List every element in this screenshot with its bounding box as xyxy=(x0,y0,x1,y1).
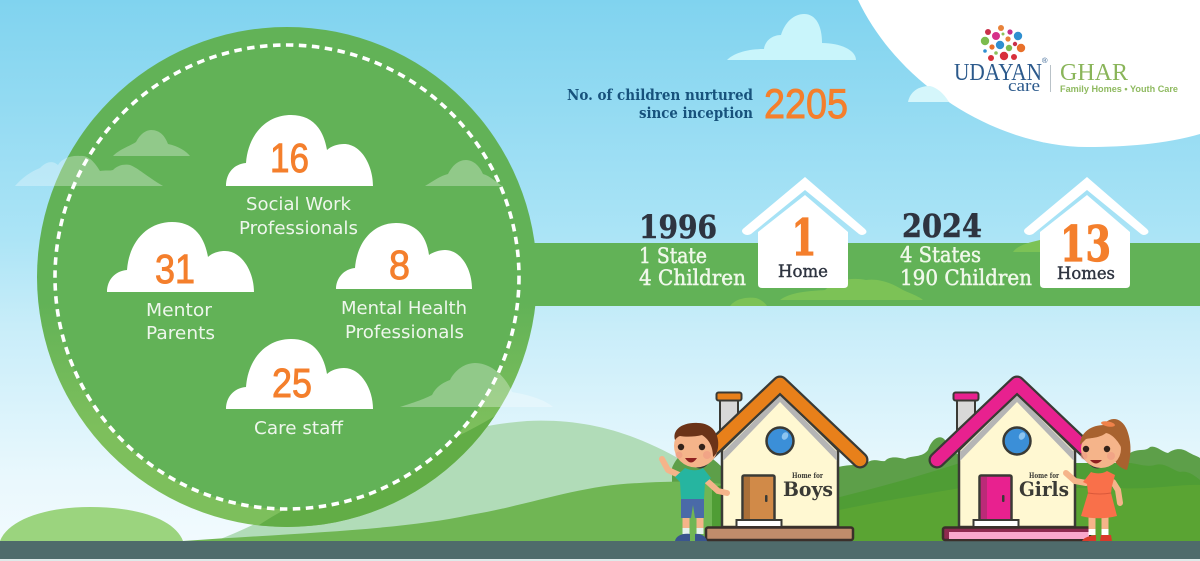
stat: mentor parents xyxy=(107,222,254,344)
logo tagline: Family Homes • Youth Care xyxy=(1060,84,1178,95)
round window xyxy=(766,428,794,454)
roof outline xyxy=(700,384,860,460)
details 1996: 1 State xyxy=(639,244,707,268)
timeline 1996 xyxy=(639,177,866,290)
body xyxy=(758,195,848,288)
boy shirt xyxy=(675,468,711,499)
number 31: 31 xyxy=(155,246,195,292)
base highlight xyxy=(949,532,1089,539)
boy eyes xyxy=(678,444,705,450)
label: Parents xyxy=(146,323,215,344)
boy shorts xyxy=(681,497,704,518)
callout text: since inception xyxy=(639,105,753,122)
panel: staff circle xyxy=(15,27,560,560)
door xyxy=(742,476,774,520)
hills: right green slope xyxy=(712,463,1200,541)
sky cloud top xyxy=(727,14,856,60)
girl hair xyxy=(1080,425,1121,447)
details 2024: 4 States xyxy=(900,243,981,267)
roof outline xyxy=(937,384,1097,460)
wall xyxy=(722,393,838,527)
label: Homes xyxy=(1057,264,1115,284)
girl mouth xyxy=(1090,460,1102,464)
white house 2 xyxy=(1024,177,1148,288)
roof xyxy=(1024,177,1148,235)
label: Mental Health xyxy=(341,298,467,319)
body xyxy=(1040,195,1130,288)
circle outer ring xyxy=(37,27,537,527)
dashed inner ring xyxy=(55,45,519,509)
sign large: Boys xyxy=(783,477,833,501)
ground road xyxy=(0,541,1200,559)
logo GHAR: GHAR xyxy=(1060,60,1128,86)
count: 13 xyxy=(1060,215,1111,273)
character: girl xyxy=(1066,419,1130,541)
girl waist xyxy=(1088,493,1111,494)
callout text: No. of children nurtured xyxy=(567,87,753,104)
chimney xyxy=(957,398,975,438)
boy hair xyxy=(674,423,718,457)
boy mouth xyxy=(685,458,697,462)
boy head xyxy=(674,424,718,468)
hills: right bright front slope xyxy=(830,485,1200,541)
ring shaded by hill xyxy=(258,416,495,527)
boy legs xyxy=(686,516,700,530)
window glint xyxy=(1017,431,1027,441)
step xyxy=(736,520,782,527)
pale clouds over circle and sky xyxy=(15,130,553,407)
girl shoes xyxy=(1082,535,1112,541)
green timeline band xyxy=(500,243,1200,306)
boy shoes xyxy=(675,534,707,541)
label: Care staff xyxy=(254,418,344,439)
girl bow xyxy=(1101,420,1115,428)
door knob xyxy=(765,495,768,502)
girl eyes xyxy=(1083,446,1110,452)
number 25: 25 xyxy=(272,360,312,406)
chimney xyxy=(720,398,738,438)
base xyxy=(706,528,853,540)
details 2024: 190 Children xyxy=(900,266,1032,290)
character: boy xyxy=(662,423,727,541)
hills: pale background hill xyxy=(215,421,690,541)
logo xyxy=(954,25,1178,95)
hills: left light mound xyxy=(0,507,183,541)
girl cheeks xyxy=(1080,452,1115,460)
cloud xyxy=(336,223,472,289)
base xyxy=(943,528,1090,540)
label: Social Work xyxy=(246,194,352,215)
door shade xyxy=(981,477,987,519)
label: Professionals xyxy=(345,322,464,343)
house: boys xyxy=(700,384,860,540)
door xyxy=(980,476,1012,520)
number 8: 8 xyxy=(389,242,410,288)
girl socks xyxy=(1092,529,1105,535)
sign small: Home for xyxy=(1029,471,1060,480)
year 1996: 1996 xyxy=(639,208,717,246)
boy socks xyxy=(686,528,700,534)
logo registered mark: ® xyxy=(1042,56,1048,65)
step xyxy=(974,520,1018,527)
stat: mental health professionals xyxy=(336,223,472,343)
hills: middle green slope xyxy=(183,482,760,541)
sky cloud near logo xyxy=(908,86,949,102)
boy cheeks xyxy=(676,451,711,459)
roof xyxy=(742,177,866,235)
cloud xyxy=(107,222,254,292)
number 16: 16 xyxy=(270,135,309,181)
girl legs xyxy=(1092,515,1105,530)
cloud xyxy=(226,339,373,409)
details 1996: 4 Children xyxy=(639,266,746,290)
girl arms xyxy=(1066,473,1120,503)
door knob xyxy=(1002,495,1004,502)
white logo corner xyxy=(858,0,1200,147)
sign large: Girls xyxy=(1019,477,1069,501)
band clouds xyxy=(730,240,1040,306)
year 2024: 2024 xyxy=(902,207,982,245)
timeline 2024 xyxy=(900,177,1148,290)
girl head xyxy=(1081,430,1121,468)
label: Mentor xyxy=(146,300,213,321)
chimney cap xyxy=(954,392,978,400)
house: girls xyxy=(937,384,1097,540)
wall xyxy=(959,393,1075,527)
logo UDAYAN: UDAYAN xyxy=(954,60,1042,86)
stat: social work professionals xyxy=(226,115,373,239)
logo divider xyxy=(1050,65,1051,92)
under-roof shadow xyxy=(960,395,1074,461)
ground edge xyxy=(0,559,1200,561)
girl dress xyxy=(1081,471,1117,518)
under-roof shadow xyxy=(723,395,837,461)
round window xyxy=(1004,428,1030,454)
count: 1 xyxy=(792,208,816,267)
circle inner disc xyxy=(55,45,519,509)
sign small: Home for xyxy=(792,471,824,480)
white house 1 xyxy=(742,177,866,288)
logo care: care xyxy=(1008,76,1040,95)
roof fill xyxy=(700,384,860,460)
cloud xyxy=(226,115,373,186)
stat: care staff xyxy=(226,339,373,439)
girl ponytail xyxy=(1105,419,1130,470)
boy arms xyxy=(662,459,727,493)
callout: children nurtured xyxy=(567,80,848,127)
chimney cap xyxy=(716,392,742,400)
logo tree dots xyxy=(981,25,1025,61)
roof fill xyxy=(937,384,1097,460)
label: Home xyxy=(778,262,828,282)
label: Professionals xyxy=(239,218,358,239)
hills: back row bushes xyxy=(672,437,1200,541)
door shade xyxy=(744,477,750,519)
window glint xyxy=(780,431,790,441)
callout number: 2205 xyxy=(764,80,848,127)
